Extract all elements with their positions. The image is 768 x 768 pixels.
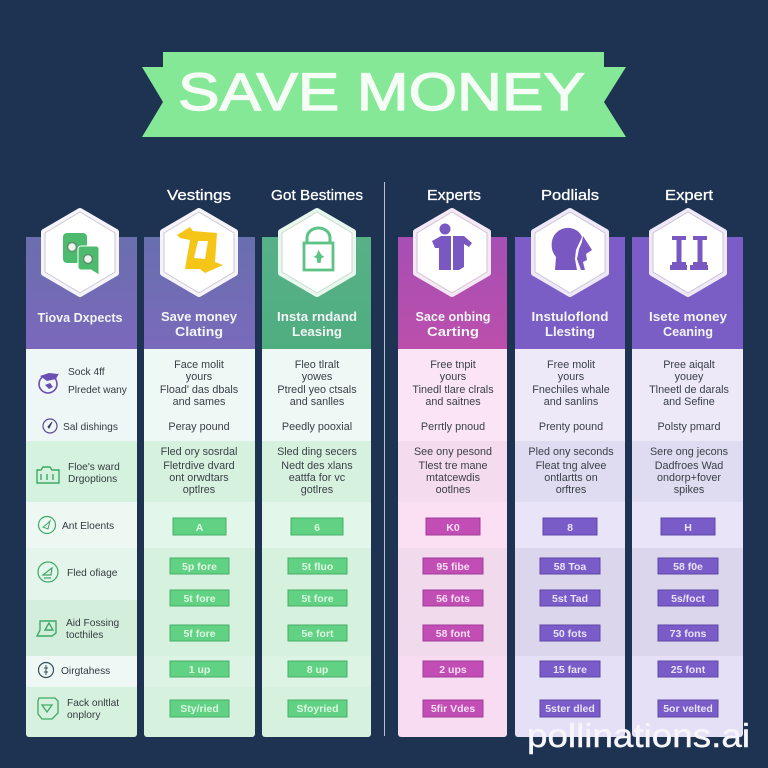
cell text	[160, 359, 239, 496]
hexagon badge: padlock	[281, 211, 353, 294]
cell text: Face molit	[174, 359, 224, 371]
cell text: yours	[558, 371, 585, 383]
panel: column 4	[515, 211, 625, 737]
value buttons: Sfoyried	[296, 703, 339, 715]
cell text: Tinedl tlare clrals	[412, 384, 494, 396]
value buttons: H	[684, 522, 692, 534]
panel: column 2	[262, 211, 371, 737]
panel: row labels column	[26, 211, 137, 737]
column title: Leasing	[292, 325, 342, 339]
row label: fossing: tocthiles	[66, 630, 103, 641]
cell text	[649, 359, 730, 496]
value buttons: 5p fore	[182, 561, 217, 573]
column headings: Expert	[665, 187, 714, 204]
cell text: Fled ory sosrdal	[161, 446, 237, 458]
row label: ward: Floe's ward	[68, 462, 120, 473]
value buttons: 58 f0e	[673, 561, 703, 573]
value buttons: 8	[567, 522, 573, 534]
cell text: Fnechiles whale	[532, 384, 610, 396]
row label: sock	[39, 367, 128, 396]
cell text: Prenty pound	[539, 421, 603, 433]
watermark: pollinations.ai	[527, 717, 750, 754]
cell text: yours	[440, 371, 467, 383]
row label: dishings	[43, 419, 118, 433]
cell text: Peray pound	[168, 421, 230, 433]
row label: ontlat	[38, 698, 119, 721]
cell text: Free molit	[547, 359, 595, 371]
value buttons: 1 up	[189, 664, 210, 676]
row label: elements: Ant Eloents	[62, 521, 114, 532]
value buttons: 5t fore	[301, 593, 334, 605]
row label: organises: Oirgtahess	[61, 666, 110, 677]
cell text: and Sefine	[663, 396, 715, 408]
hexagon badge: pillars	[652, 211, 724, 294]
row label: sock: Sock 4ff	[68, 367, 105, 378]
row label: organises	[38, 662, 110, 678]
cell text: Peedly pooxial	[282, 421, 352, 433]
column title: Instuloflond	[532, 310, 608, 324]
cell text: eattfa for vc	[289, 472, 346, 484]
column title: Save money	[161, 310, 237, 324]
value buttons: 2 ups	[439, 664, 467, 676]
hexagon badge: yellow arrows	[163, 211, 235, 294]
column title: Carting	[427, 325, 479, 339]
cell text: ont orwdtars	[169, 472, 229, 484]
column title	[277, 310, 357, 339]
panel: column 3	[398, 211, 507, 737]
row label: ontlat: onplory	[67, 710, 101, 721]
column headings: Got Bestimes	[271, 187, 363, 204]
cell text: mtatcewdis	[426, 472, 481, 484]
column title: Insta rndand	[277, 310, 357, 324]
cell text: Ptredl yeo ctsals	[277, 384, 357, 396]
column title	[532, 310, 608, 339]
hexagon badge: head profile	[534, 211, 606, 294]
column title: Clating	[175, 325, 223, 339]
row label: dishings: Sal dishings	[63, 422, 118, 433]
cell text: ontlartts on	[544, 472, 598, 484]
hexagon badge: money notes	[44, 211, 116, 294]
value buttons	[658, 518, 718, 717]
value buttons: 5s/foct	[671, 593, 705, 605]
cell text: yours	[186, 371, 213, 383]
cell text: spikes	[674, 484, 705, 496]
row label: elements	[38, 516, 114, 534]
value buttons: K0	[446, 522, 460, 534]
column headings	[167, 187, 714, 204]
value buttons	[288, 518, 347, 717]
cell text: Fload' das dbals	[160, 384, 239, 396]
row label: sock: Plredet wany	[68, 385, 128, 396]
cell text	[528, 359, 614, 496]
value buttons: 95 fibe	[436, 561, 470, 573]
title: SAVE MONEY	[178, 63, 585, 122]
cell text: Fleo tlralt	[295, 359, 339, 371]
value buttons: Sty/ried	[180, 703, 219, 715]
value buttons: 58 Toa	[554, 561, 586, 573]
hexagon badge: person with coat	[416, 211, 488, 294]
value buttons	[540, 518, 600, 717]
cell text: Tlest tre mane	[418, 460, 488, 472]
cell text: youey	[675, 371, 704, 383]
row label: ward: Drgoptions	[68, 474, 117, 485]
panel: column 1	[144, 211, 255, 737]
cell text	[277, 359, 358, 496]
column headings: Podlials	[541, 187, 599, 204]
cell text: See ony pesond	[414, 446, 492, 458]
column title: Sace onbing	[416, 310, 490, 324]
row label: ontlat: Fack onltlat	[67, 698, 119, 709]
column headings: Vestings	[167, 187, 231, 204]
column headings: Experts	[427, 187, 481, 204]
cell text: Polsty pmard	[657, 421, 721, 433]
row label: foliage: Fled ofiage	[67, 568, 118, 579]
value buttons: 5e fort	[301, 628, 334, 640]
value buttons: 5t fluo	[302, 561, 333, 573]
value buttons: 15 fare	[553, 664, 587, 676]
cell text: Fleat tng alvee	[536, 460, 606, 472]
cell text: Pree aiqalt	[663, 359, 715, 371]
cell text: Pled ony seconds	[528, 446, 614, 458]
column title: Llesting	[545, 325, 595, 339]
column title	[649, 310, 727, 339]
cell text: gotlres	[301, 484, 334, 496]
value buttons: 8 up	[307, 664, 328, 676]
cell text: Perrtly pnoud	[421, 421, 485, 433]
cell text: Dadfroes Wad	[655, 460, 723, 472]
cell text: and sanlles	[290, 396, 345, 408]
cell text	[412, 359, 494, 496]
value buttons	[423, 518, 483, 717]
title banner	[142, 52, 626, 137]
value buttons: 5st Tad	[552, 593, 588, 605]
cell text: Sere ong jecons	[650, 446, 729, 458]
column title: Tiova Dxpects	[38, 311, 123, 325]
row label: fossing	[37, 618, 120, 641]
row label: fossing: Aid Fossing	[66, 618, 120, 629]
value buttons: 5fir Vdes	[431, 703, 475, 715]
value buttons: 5t fore	[183, 593, 216, 605]
value buttons: 56 fots	[436, 593, 470, 605]
value buttons: 5f fore	[183, 628, 216, 640]
cell text: yowes	[302, 371, 333, 383]
value buttons: A	[196, 522, 204, 534]
value buttons: 25 font	[671, 664, 706, 676]
cell text: ondorp+fover	[657, 472, 721, 484]
cell text: and sanlins	[544, 396, 599, 408]
cell text: Sled ding secers	[277, 446, 358, 458]
cell text: ootlnes	[436, 484, 471, 496]
row label: ward	[37, 462, 120, 485]
cell text: Free tnpit	[430, 359, 476, 371]
value buttons: 58 font	[436, 628, 471, 640]
column title: Isete money	[649, 310, 727, 324]
cell text: Nedt des xlans	[281, 460, 353, 472]
value buttons: 5or velted	[663, 703, 713, 715]
value buttons: 5ster dled	[545, 703, 595, 715]
value buttons: 6	[314, 522, 320, 534]
cell text: Tlneetl de darals	[649, 384, 730, 396]
row label: foliage	[38, 562, 118, 582]
cell text: optlres	[183, 484, 216, 496]
panel: column 5	[632, 211, 743, 737]
value buttons	[170, 518, 229, 717]
cell text: orftres	[556, 484, 587, 496]
value buttons: 50 fots	[553, 628, 587, 640]
cell text: and sames	[173, 396, 226, 408]
cell text: and saitnes	[425, 396, 481, 408]
cell text: Fletrdive dvard	[163, 460, 235, 472]
column title	[416, 310, 490, 339]
column title	[161, 310, 237, 339]
column title: Ceaning	[663, 325, 713, 339]
value buttons: 73 fons	[670, 628, 707, 640]
